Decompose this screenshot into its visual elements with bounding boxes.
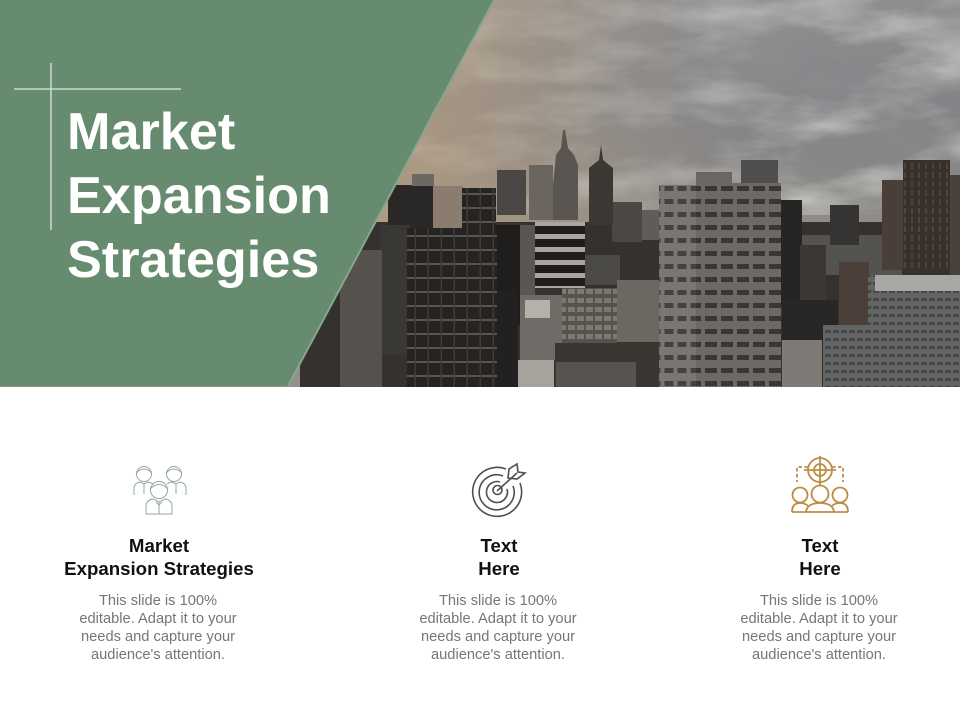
column 2 heading: Text <box>480 535 517 556</box>
column 1 heading <box>64 535 254 579</box>
column 1 text: This slide is 100% <box>99 593 217 609</box>
column 1 text <box>79 593 237 663</box>
column 3 text <box>740 593 898 663</box>
column 2 heading <box>478 535 520 579</box>
skyline buildings <box>300 130 960 387</box>
column 1 text: editable. Adapt it to your <box>79 611 237 627</box>
column 3 heading <box>799 535 841 579</box>
column 1 text: needs and capture your <box>81 629 235 645</box>
icon: target with arrow <box>472 462 527 518</box>
column 2 text: This slide is 100% <box>439 593 557 609</box>
title: Expansion <box>67 167 331 225</box>
column 1 text: audience's attention. <box>91 647 225 663</box>
title: Strategies <box>67 231 319 289</box>
column 2 text: audience's attention. <box>431 647 565 663</box>
hero photo: city skyline under cloudy sky <box>0 0 960 387</box>
column 3 text: This slide is 100% <box>760 593 878 609</box>
decorative cross lines <box>14 63 181 230</box>
sky <box>0 0 960 387</box>
column 2 text: editable. Adapt it to your <box>419 611 577 627</box>
column 1 heading: Expansion Strategies <box>64 558 254 579</box>
column 3 text: editable. Adapt it to your <box>740 611 898 627</box>
column 3 heading: Here <box>799 558 841 579</box>
column 2 text: needs and capture your <box>421 629 575 645</box>
title: Market <box>67 103 235 161</box>
column 2 heading: Here <box>478 558 520 579</box>
icon: audience target <box>791 456 849 513</box>
column 1 heading: Market <box>129 535 189 556</box>
title <box>67 103 331 289</box>
column 3 text: needs and capture your <box>742 629 896 645</box>
column 3 text: audience's attention. <box>752 647 886 663</box>
green title panel <box>0 0 495 386</box>
column 2 text <box>419 593 577 663</box>
column 3 heading: Text <box>802 535 838 556</box>
icon: people group <box>134 466 186 514</box>
